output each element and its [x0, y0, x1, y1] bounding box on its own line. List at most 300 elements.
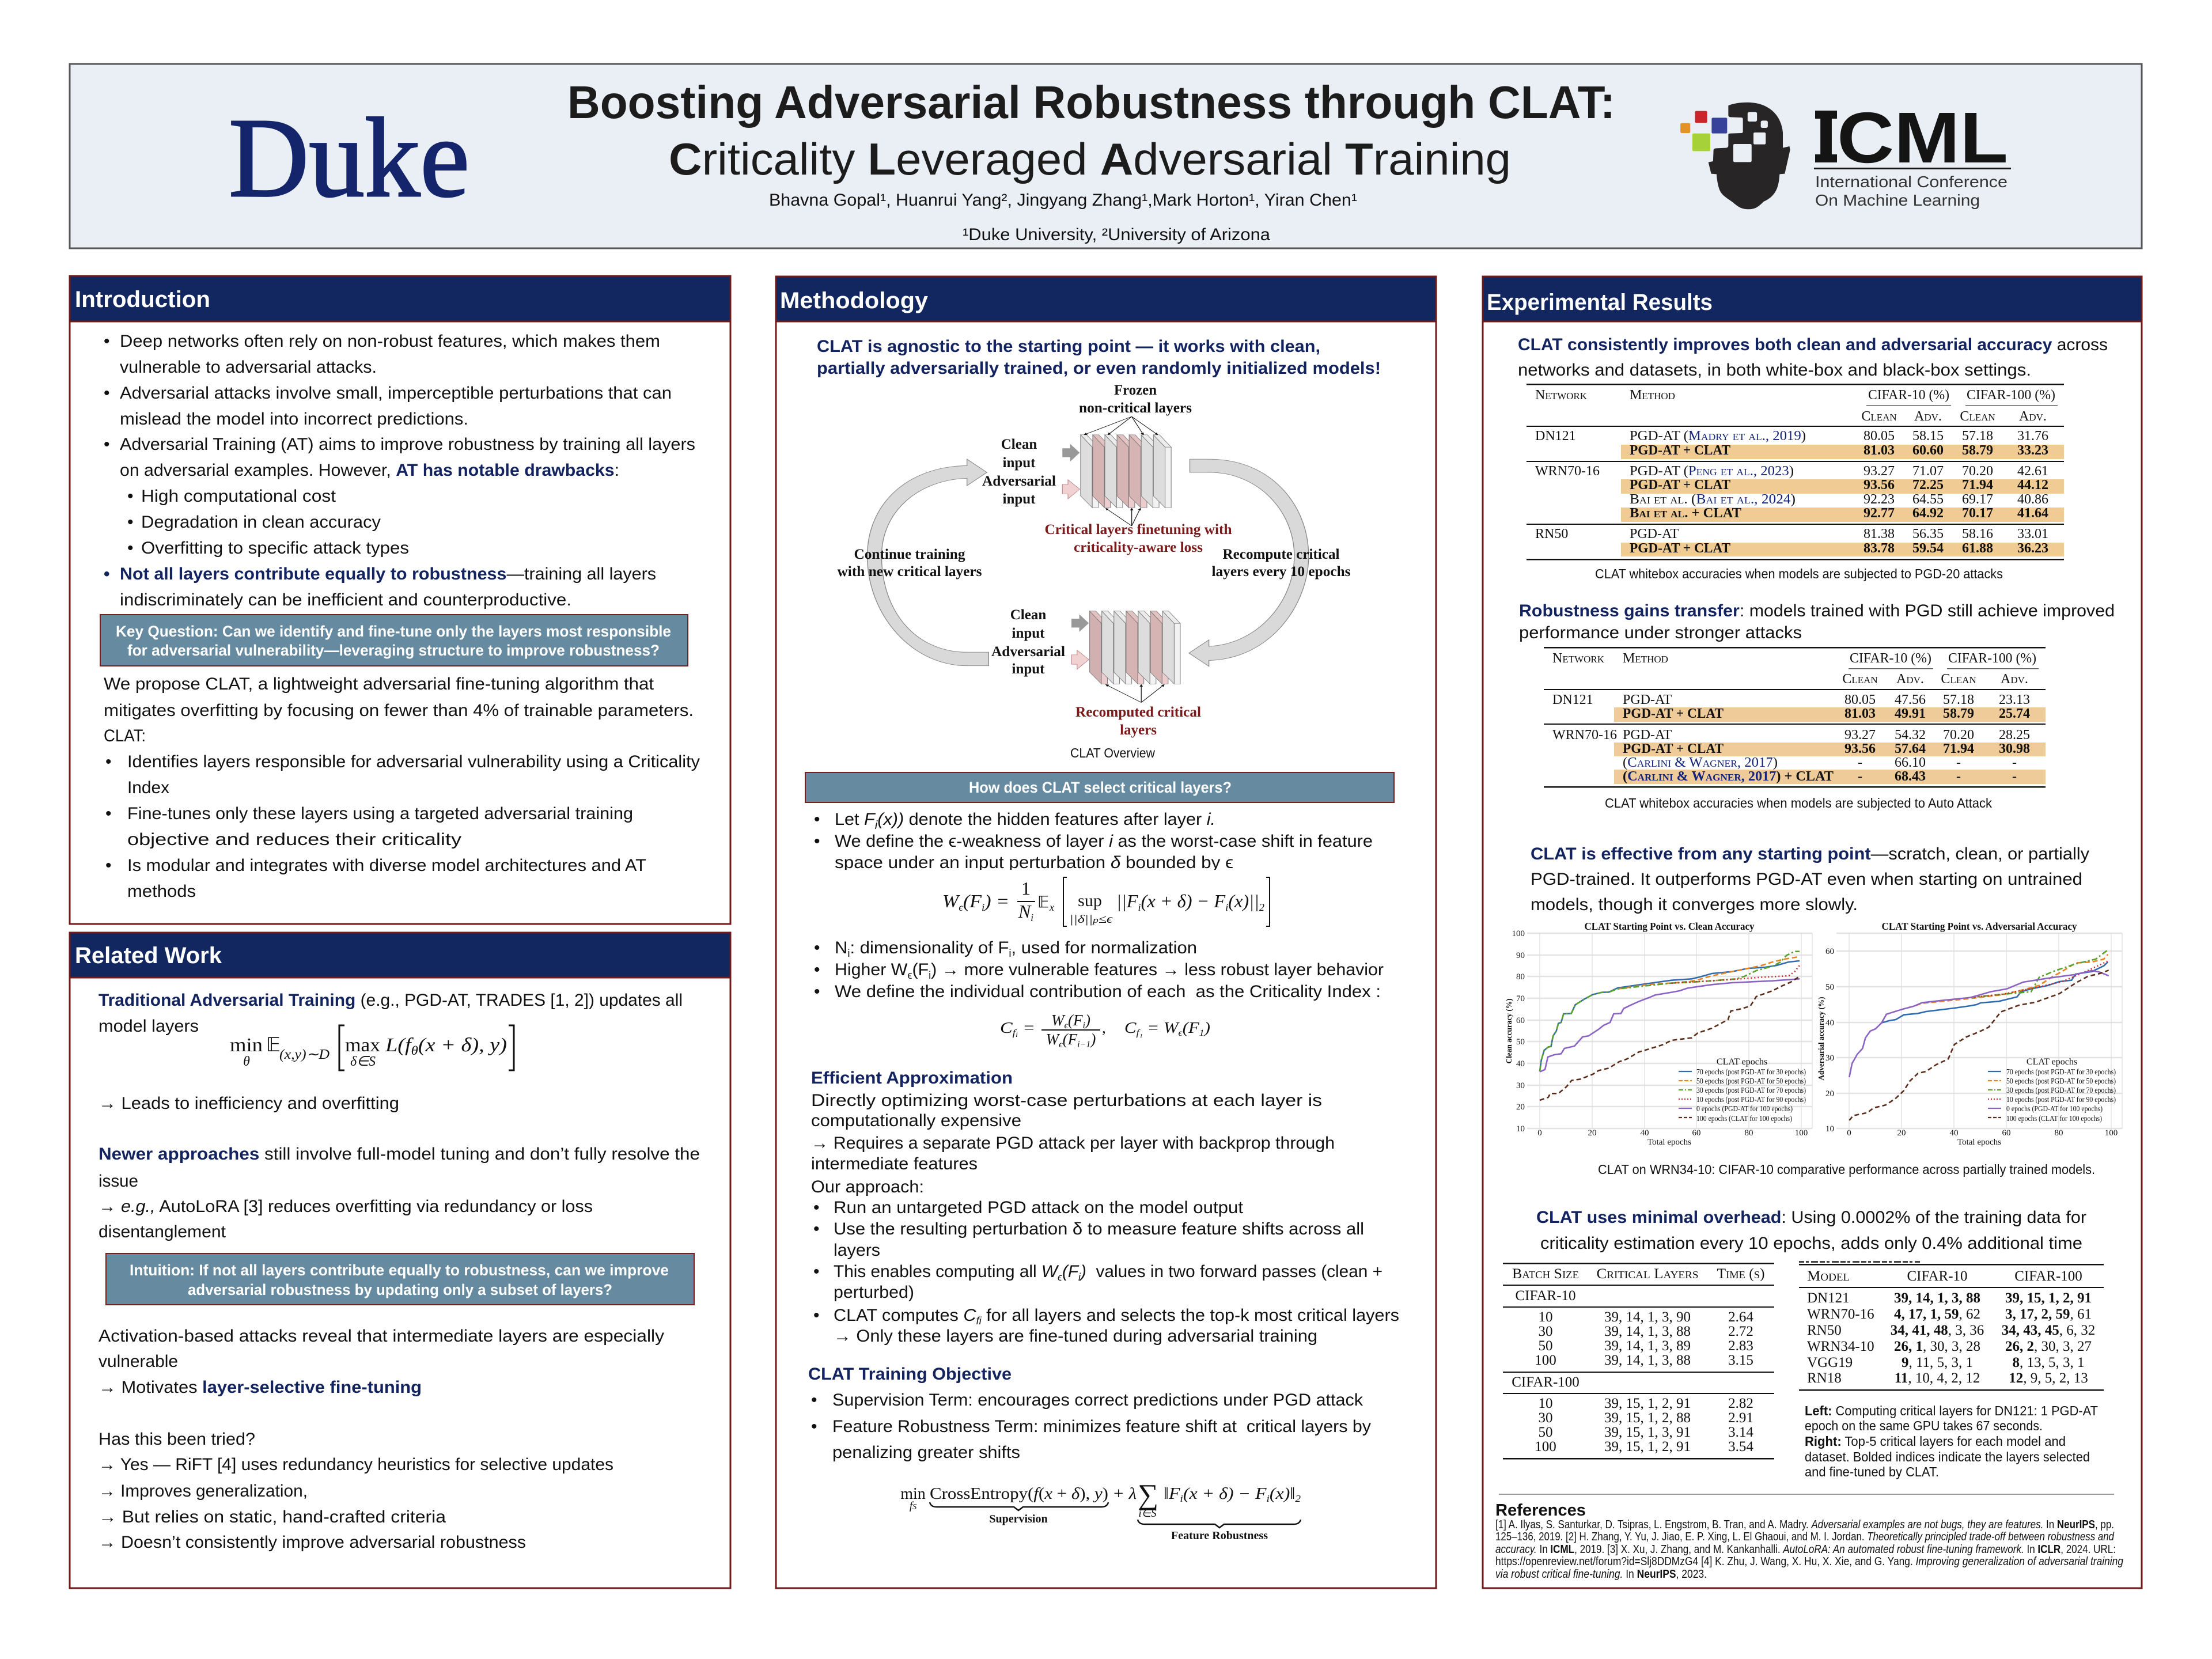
- text: efficient approximation: Our approach:: [811, 1177, 924, 1196]
- chart: adversarial accuracy: 20: [1897, 1128, 1906, 1138]
- note: left and right tables: epoch on the same GPU takes 67 seconds.: [1805, 1418, 2043, 1433]
- formula: criticality index: (F: [1063, 1031, 1078, 1048]
- table: PGD-20 whitebox accuracies: Adv.: [1914, 409, 1942, 424]
- table: PGD-20 whitebox accuracies: Clean: [1861, 409, 1897, 424]
- chart: clean accuracy: 100: [1512, 929, 1525, 938]
- table: PGD-20 whitebox accuracies: PGD-AT + CLAT: [1630, 443, 1730, 458]
- table: top-5 critical layers: CIFAR-100: [2014, 1268, 2082, 1284]
- formula: training objective: ‖F: [1164, 1485, 1178, 1503]
- bullets: epsilon weakness: [814, 810, 1373, 877]
- bullets: normalization and criticality: •: [814, 938, 820, 957]
- table: batch size and time: [1503, 1263, 1774, 1460]
- table: Auto Attack whitebox accuracies: 49.91: [1895, 706, 1926, 721]
- diagram: CLAT overview: Adversarial: [982, 474, 1056, 489]
- table: PGD-20 whitebox accuracies: 44.12: [2017, 478, 2048, 493]
- text: CLAT proposal: Index: [127, 778, 169, 797]
- legend: 0 epochs (PGD-AT for 100 epochs): [2006, 1105, 2103, 1113]
- bullets: epsilon weakness: denote the hidden features after layer i.: [908, 810, 1215, 829]
- chart: adversarial accuracy: 0: [1847, 1128, 1851, 1138]
- table: top-5 critical layers: WRN70-16: [1807, 1306, 1874, 1322]
- formula: training objective: i: [1267, 1493, 1270, 1504]
- table: PGD-20 whitebox accuracies: 70.20: [1962, 464, 1993, 479]
- bullets: epsilon weakness: i: [875, 819, 878, 832]
- heading: Experimental Results: Experimental Results: [1487, 290, 1713, 315]
- diagram: CLAT overview: Adversarial: [991, 644, 1065, 660]
- table: Auto Attack whitebox accuracies: CIFAR-10 (%): [1850, 651, 1931, 666]
- table: Auto Attack whitebox accuracies: PGD-AT: [1623, 728, 1672, 743]
- formula: min-max objective: (x + δ), y): [418, 1035, 507, 1056]
- table: batch size and time: 39, 14, 1, 3, 90: [1604, 1309, 1691, 1325]
- text: efficient approximation: •: [813, 1198, 820, 1217]
- legend: 10 epochs (post PGD-AT for 90 epochs): [1696, 1096, 1806, 1104]
- statement: agnostic to starting point: [817, 337, 1381, 378]
- chart: adversarial accuracy: CLAT Starting Point vs. Adversarial Accuracy: [1881, 921, 2077, 932]
- bullets: normalization and criticality: ϵ: [907, 969, 912, 981]
- chart: clean accuracy: [1505, 921, 1812, 1147]
- table: PGD-20 whitebox accuracies: PGD-AT (Madry et al., 2019): [1630, 429, 1806, 444]
- formula: min-max objective: min: [230, 1035, 263, 1056]
- table: Auto Attack whitebox accuracies: 93.27: [1844, 728, 1876, 743]
- table: PGD-20 whitebox accuracies: 42.61: [2017, 464, 2048, 479]
- title: Boosting Adversarial Robustness through CLAT:: [567, 77, 1615, 128]
- table: Auto Attack whitebox accuracies: PGD-AT + CLAT: [1623, 706, 1724, 721]
- panel: Methodology: [776, 276, 1436, 1588]
- chart: clean accuracy: 60: [1692, 1128, 1700, 1138]
- table: Auto Attack whitebox accuracies: Method: [1623, 651, 1668, 666]
- bullets: adversarial training background: •: [127, 539, 134, 558]
- formula: weakness: i: [1031, 912, 1033, 923]
- text: efficient approximation: → Only these layers are fine-tuned during adversarial training: [834, 1327, 1317, 1346]
- table: top-5 critical layers: RN50: [1807, 1323, 1842, 1338]
- table: top-5 critical layers: 11, 10, 4, 2, 12: [1895, 1370, 1980, 1386]
- table: batch size and time: 2.82: [1728, 1396, 1753, 1411]
- table: batch size and time: 39, 14, 1, 3, 88: [1604, 1324, 1691, 1339]
- legend: 100 epochs (CLAT for 100 epochs): [1696, 1115, 1792, 1123]
- table: batch size and time: 2.72: [1728, 1324, 1753, 1339]
- table: Auto Attack whitebox accuracies: 71.94: [1943, 741, 1974, 756]
- diagram: CLAT overview: Clean: [1001, 437, 1037, 452]
- table: Auto Attack whitebox accuracies: PGD-AT: [1623, 692, 1672, 707]
- table: PGD-20 whitebox accuracies: 93.56: [1863, 478, 1895, 493]
- statement: effective from any starting point: models, though it converges more slowly.: [1531, 895, 1858, 914]
- table: top-5 critical layers: VGG19: [1807, 1355, 1853, 1370]
- table: PGD-20 whitebox accuracies: CIFAR-100 (%): [1967, 388, 2055, 403]
- table: batch size and time: 3.54: [1728, 1439, 1753, 1455]
- table: Auto Attack whitebox accuracies: -: [1956, 755, 1961, 770]
- text: efficient approximation: fi: [976, 1315, 982, 1327]
- table: batch size and time: 2.91: [1728, 1410, 1753, 1426]
- table: batch size and time: 39, 15, 1, 2, 91: [1604, 1396, 1691, 1411]
- text: layer-selective fine-tuning: Has this been tried?: [99, 1430, 255, 1449]
- heading: Methodology: [776, 276, 1436, 321]
- note: left and right tables: Right: Top-5 critical layers for each model and: [1805, 1434, 2066, 1449]
- text: efficient approximation: Run an untargeted PGD attack on the model output: [834, 1198, 1244, 1217]
- legend: 70 epochs (post PGD-AT for 30 epochs): [2006, 1068, 2116, 1077]
- formula: criticality index: ): [1203, 1019, 1210, 1036]
- formula: weakness: (F: [963, 891, 982, 911]
- text: efficient approximation: •: [813, 1306, 820, 1325]
- text: efficient approximation: [811, 1069, 1399, 1346]
- table: PGD-20 whitebox accuracies: Bai et al. + CLAT: [1630, 506, 1741, 521]
- table: batch size and time: Batch Size: [1512, 1266, 1579, 1282]
- text: efficient approximation: Directly optimizing worst-case perturbations at each layer is: [811, 1091, 1322, 1110]
- legend: 30 epochs (post PGD-AT for 70 epochs): [1696, 1086, 1806, 1095]
- table: PGD-20 whitebox accuracies: 61.88: [1962, 541, 1993, 556]
- panel: Experimental Results: [1483, 276, 2142, 1588]
- text: layer-selective fine-tuning: vulnerable: [99, 1352, 178, 1371]
- legend: 10 epochs (post PGD-AT for 90 epochs): [2006, 1096, 2116, 1104]
- table: batch size and time: 39, 15, 1, 2, 91: [1604, 1439, 1691, 1455]
- text: CLAT proposal: Fine-tunes only these layers using a targeted adversarial training: [127, 804, 633, 823]
- chart: adversarial accuracy: Adversarial accuracy (%): [1817, 997, 1826, 1081]
- table: batch size and time: 2.64: [1728, 1309, 1753, 1325]
- bullets: adversarial training background: •: [104, 565, 110, 584]
- table: PGD-20 whitebox accuracies: PGD-AT: [1630, 527, 1679, 541]
- formula: criticality index: =: [1018, 1019, 1035, 1036]
- note: left and right tables: dataset. Bolded indices indicate the layers selected: [1805, 1449, 2090, 1464]
- formula: training objective: Feature Robustness: [1171, 1529, 1268, 1542]
- chart: clean accuracy: Clean accuracy (%): [1505, 998, 1514, 1063]
- bullets: normalization and criticality: : dimensionality of F: [850, 938, 1009, 957]
- table: top-5 critical layers: DN121: [1807, 1290, 1850, 1306]
- text: layer-selective fine-tuning: → But relies on static, hand-crafted criteria: [99, 1508, 446, 1527]
- heading: Related Work: [70, 933, 730, 978]
- heading: Methodology: Methodology: [780, 288, 929, 313]
- bullets: adversarial training background: vulnerable to adversarial attacks.: [120, 358, 377, 377]
- table: top-5 critical layers: 26, 2, 30, 3, 27: [2005, 1339, 2092, 1354]
- text: efficient approximation: computationally expensive: [811, 1111, 1021, 1130]
- Duke logo: Duke: [229, 94, 469, 221]
- text: CLAT proposal: We propose CLAT, a lightweight adversarial fine-tuning algorithm that: [104, 675, 654, 694]
- text: CLAT proposal: Is modular and integrates with diverse model architectures and AT: [127, 856, 646, 875]
- table: top-5 critical layers: [1799, 1264, 2104, 1391]
- bullets: normalization and criticality: ) → more vulnerable features → less robust layer behavior: [931, 960, 1384, 979]
- legend: CLAT epochs: [1717, 1057, 1767, 1067]
- bullets: normalization and criticality: We define the individual contribution of each as the Criticality Index :: [835, 982, 1381, 1001]
- formula: criticality index: [1000, 1012, 1210, 1050]
- text: efficient approximation: Use the resulting perturbation δ to measure feature shifts across all: [834, 1219, 1364, 1238]
- text: efficient approximation: (F: [1062, 1262, 1080, 1281]
- text: CLAT proposal: Identifies layers responsible for adversarial vulnerability using a Criticality: [127, 752, 700, 771]
- bullets: adversarial training background: Deep networks often rely on non-robust features, which makes them: [120, 332, 660, 351]
- references: [1] A. Ilyas, S. Santurkar, D. Tsipras, L. Engstrom, B. Tran, and A. Madry. Adversarial examples are not bugs, they are features. In NeurIPS, pp.: [1495, 1518, 2114, 1531]
- table: top-5 critical layers: 39, 15, 1, 2, 91: [2005, 1290, 2092, 1306]
- table: Auto Attack whitebox accuracies: 57.64: [1895, 741, 1926, 756]
- chart: clean accuracy: 40: [1641, 1128, 1649, 1138]
- formula: training objective: + λ: [1112, 1485, 1137, 1503]
- chart: clean accuracy: 60: [1516, 1016, 1525, 1025]
- diagram: CLAT overview: non-critical layers: [1079, 400, 1192, 416]
- bullets: normalization and criticality: Higher W: [835, 960, 907, 979]
- caption: Auto Attack table: CLAT whitebox accuracies when models are subjected to Auto Attack: [1605, 796, 1992, 810]
- formula: min-max objective: max: [345, 1035, 380, 1056]
- table: batch size and time: 50: [1538, 1425, 1553, 1440]
- bullets: normalization and criticality: i: [929, 969, 931, 981]
- diagram: CLAT overview: with new critical layers: [838, 564, 982, 579]
- title: Criticality Leveraged Adversarial Training: [669, 134, 1511, 184]
- table: Auto Attack whitebox accuracies: -: [2012, 769, 2017, 784]
- diagram: CLAT overview: [838, 382, 1351, 738]
- table: batch size and time: 2.83: [1728, 1338, 1753, 1354]
- statement: minimal overhead: criticality estimation every 10 epochs, adds only 0.4% additional time: [1540, 1234, 2082, 1253]
- text: CLAT proposal: CLAT:: [104, 726, 146, 745]
- formula: criticality index: i: [1082, 1021, 1085, 1031]
- chart: clean accuracy: CLAT Starting Point vs. Clean Accuracy: [1584, 921, 1755, 932]
- table: PGD-20 whitebox accuracies: 36.23: [2017, 541, 2048, 556]
- text: CLAT proposal: •: [105, 856, 112, 875]
- callout: intuition: adversarial robustness by updating only a subset of layers?: [188, 1281, 612, 1298]
- diagram: CLAT overview: input: [1003, 455, 1036, 471]
- formula: criticality index: ): [1089, 1031, 1096, 1048]
- chart: clean accuracy: 20: [1588, 1128, 1597, 1138]
- formula: weakness: 𝔼: [1037, 892, 1049, 911]
- statement: robustness gains transfer: [1519, 601, 2115, 642]
- table: PGD-20 whitebox accuracies: 58.79: [1962, 443, 1993, 458]
- table: PGD-20 whitebox accuracies: PGD-AT + CLAT: [1630, 478, 1730, 493]
- formula: criticality index: ϵ: [1059, 1040, 1063, 1050]
- table: PGD-20 whitebox accuracies: 31.76: [2017, 429, 2048, 444]
- statement: minimal overhead: [1536, 1208, 2086, 1253]
- formula: weakness: ||δ|| p≤ϵ: [1069, 913, 1113, 926]
- text: traditional adversarial training: [99, 991, 683, 1036]
- chart: clean accuracy: 70: [1516, 994, 1525, 1003]
- table: PGD-20 whitebox accuracies: PGD-AT + CLAT: [1630, 541, 1730, 556]
- table: Auto Attack whitebox accuracies: Clean: [1941, 672, 1976, 687]
- chart: adversarial accuracy: 10: [1825, 1124, 1834, 1134]
- table: PGD-20 whitebox accuracies: 58.16: [1962, 527, 1993, 541]
- table: Auto Attack whitebox accuracies: Adv.: [1896, 672, 1924, 687]
- text: layer-selective fine-tuning: Activation-based attacks reveal that intermediate layers are especially: [99, 1327, 664, 1346]
- chart: adversarial accuracy: 40: [1825, 1018, 1834, 1028]
- table: top-5 critical layers: CIFAR-10: [1907, 1268, 1968, 1284]
- table: Auto Attack whitebox accuracies: 57.18: [1943, 692, 1974, 707]
- chart: adversarial accuracy: Total epochs: [1957, 1138, 2001, 1147]
- chart: clean accuracy: 10: [1516, 1124, 1525, 1134]
- table: PGD-20 whitebox accuracies: CIFAR-10 (%): [1868, 388, 1949, 403]
- bullets: adversarial training background: indiscriminately can be inefficient and counterproductive.: [120, 590, 571, 609]
- bullets: epsilon weakness: space under an input perturbation δ bounded by ϵ: [835, 853, 1233, 872]
- arrows: training loop: [868, 416, 1309, 702]
- table: batch size and time: 39, 15, 1, 2, 88: [1604, 1410, 1691, 1426]
- formula: criticality index: ): [1084, 1012, 1090, 1029]
- chart: adversarial accuracy: 80: [2054, 1128, 2063, 1138]
- references: [1495, 1501, 2123, 1581]
- formula: weakness: (x + δ) − F: [1141, 891, 1226, 911]
- formula: criticality index: i−1: [1077, 1040, 1090, 1050]
- title: [567, 77, 1615, 184]
- table: PGD-20 whitebox accuracies: 80.05: [1863, 429, 1895, 444]
- references: via robust critical fine-tuning. In NeurIPS, 2023.: [1495, 1568, 1707, 1581]
- formula: training objective: Supervision: [989, 1513, 1048, 1525]
- chart: adversarial accuracy: [1817, 921, 2122, 1147]
- text: efficient approximation: layers: [834, 1241, 880, 1260]
- formula: weakness: x: [1049, 902, 1054, 913]
- table: PGD-20 whitebox accuracies: 69.17: [1962, 492, 1993, 507]
- formula: criticality index: (F: [1068, 1012, 1083, 1029]
- table: Auto Attack whitebox accuracies: CIFAR-100 (%): [1948, 651, 2036, 666]
- table: Auto Attack whitebox accuracies: -: [1858, 755, 1862, 770]
- diagram: CLAT overview: Recompute critical: [1222, 547, 1340, 562]
- table: PGD-20 whitebox accuracies: 71.07: [1912, 464, 1944, 479]
- formula: training objective: i∈S: [1138, 1508, 1157, 1520]
- formula: criticality index: = W: [1143, 1019, 1180, 1036]
- chart: clean accuracy: 50: [1516, 1037, 1525, 1047]
- diagram: CLAT overview: input: [1003, 491, 1036, 507]
- chart: adversarial accuracy: 40: [1949, 1128, 1959, 1138]
- formula: criticality index: (F: [1183, 1019, 1199, 1036]
- table: top-5 critical layers: 26, 1, 30, 3, 28: [1894, 1339, 1980, 1354]
- bullets: normalization and criticality: [814, 938, 1384, 1001]
- chart: clean accuracy: 90: [1516, 951, 1525, 960]
- text: efficient approximation: for all layers and selects the top-k most critical layers: [982, 1306, 1399, 1325]
- table: Auto Attack whitebox accuracies: 81.03: [1844, 706, 1876, 721]
- statement: clean and adversarial accuracy: CLAT consistently improves both clean and adversarial accuracy across: [1518, 335, 2108, 354]
- formula: min-max objective: [230, 1025, 514, 1070]
- table: batch size and time: 10: [1538, 1309, 1553, 1325]
- table: Auto Attack whitebox accuracies: (Carlini & Wagner, 2017) + CLAT: [1623, 769, 1834, 784]
- bullets: epsilon weakness: •: [814, 832, 820, 851]
- formula: weakness: i: [1138, 902, 1141, 913]
- table: top-5 critical layers: 34, 41, 48, 3, 36: [1891, 1323, 1984, 1338]
- legend: 100 epochs (CLAT for 100 epochs): [2006, 1115, 2102, 1123]
- table: batch size and time: Time (s): [1717, 1266, 1765, 1282]
- table: Auto Attack whitebox accuracies: [1544, 647, 2046, 788]
- formula: criticality index: W: [1051, 1012, 1065, 1029]
- references: https://openreview.net/forum?id=Slj8DDMzG4 [4] K. Zhu, J. Wang, X. Hu, X. Xie, and G. Yang. Improving generalization of adversarial training: [1495, 1555, 2123, 1568]
- table: PGD-20 whitebox accuracies: 93.27: [1863, 464, 1895, 479]
- formula: criticality index: f: [1013, 1028, 1017, 1038]
- formula: criticality index: ,: [1102, 1019, 1106, 1036]
- panel: Introduction: [70, 276, 730, 924]
- diagram: CLAT overview: layers every 10 epochs: [1212, 564, 1351, 579]
- text: traditional adversarial training: model layers: [99, 1017, 199, 1036]
- chart: adversarial accuracy: 30: [1825, 1054, 1834, 1063]
- text: CLAT training objective: Supervision Term: encourages correct predictions under PGD attack: [832, 1391, 1363, 1410]
- diagram: CLAT overview: Recomputed critical: [1075, 704, 1201, 720]
- table: batch size and time: 10: [1538, 1396, 1553, 1411]
- table: PGD-20 whitebox accuracies: 92.23: [1863, 492, 1895, 507]
- statement: clean and adversarial accuracy: [1518, 335, 2108, 380]
- formula: min-max objective: (x,y)∼D: [279, 1047, 329, 1062]
- chart: clean accuracy: 0: [1537, 1128, 1542, 1138]
- formula: min-max objective: θ: [411, 1043, 418, 1058]
- chart: clean accuracy: 30: [1516, 1081, 1525, 1090]
- references: 125–136, 2019. [2] H. Zhang, Y. Yu, J. Jiao, E. P. Xing, L. El Ghaoui, and M. I. Jordan. Theoretically principled trade-off between robustness and: [1495, 1531, 2115, 1543]
- table: top-5 critical layers: 4, 17, 1, 59, 62: [1894, 1306, 1980, 1322]
- statement: effective from any starting point: PGD-trained. It outperforms PGD-AT even when starting on untrained: [1531, 870, 2082, 889]
- text: layer-selective fine-tuning: [99, 1327, 664, 1552]
- chart: clean accuracy: 100: [1795, 1128, 1808, 1138]
- table: PGD-20 whitebox accuracies: Clean: [1960, 409, 1995, 424]
- caption: PGD-20 table: CLAT whitebox accuracies when models are subjected to PGD-20 attacks: [1595, 566, 2003, 581]
- bullets: normalization and criticality: i: [847, 948, 850, 959]
- table: PGD-20 whitebox accuracies: Adv.: [2019, 409, 2047, 424]
- table: Auto Attack whitebox accuracies: 80.05: [1844, 692, 1876, 707]
- formula: weakness: sup: [1078, 891, 1102, 910]
- chart: clean accuracy: 20: [1516, 1103, 1525, 1112]
- legend: CLAT epochs: [2027, 1057, 2077, 1067]
- statement: minimal overhead: CLAT uses minimal overhead: Using 0.0002% of the training data for: [1536, 1208, 2086, 1227]
- authors: Bhavna Gopal¹, Huanrui Yang², Jingyang Zhang¹,Mark Horton¹, Yiran Chen¹: [769, 191, 1357, 210]
- table: Auto Attack whitebox accuracies: -: [2012, 755, 2017, 770]
- references: accuracy. In ICML, 2019. [3] X. Xu, J. Zhang, and M. Kankanhalli. AutoLoRA: An automated robust fine-tuning framework. In ICLR, 2024. URL:: [1495, 1543, 2116, 1556]
- diagram: CLAT overview: input: [1012, 626, 1045, 641]
- table: batch size and time: 39, 14, 1, 3, 88: [1604, 1353, 1691, 1368]
- diagram: CLAT overview: Frozen: [1114, 382, 1157, 398]
- table: PGD-20 whitebox accuracies: PGD-AT (Peng et al., 2023): [1630, 464, 1794, 479]
- bullets: adversarial training background: Not all layers contribute equally to robustness —training all layers: [120, 565, 656, 584]
- heading: Introduction: [70, 276, 730, 321]
- bullets: adversarial training background: •: [127, 513, 134, 532]
- bullets: adversarial training background: Adversarial attacks involve small, imperceptible perturbations that can: [120, 384, 672, 403]
- legend: 50 epochs (post PGD-AT for 50 epochs): [2006, 1077, 2116, 1086]
- table: Auto Attack whitebox accuracies: 23.13: [1999, 692, 2030, 707]
- table: Auto Attack whitebox accuracies: 25.74: [1999, 706, 2030, 721]
- formula: training objective: (x)‖: [1270, 1485, 1295, 1503]
- text: efficient approximation: → Requires a separate PGD attack per layer with backprop through: [811, 1134, 1335, 1153]
- formula: criticality index: f₁: [1136, 1028, 1143, 1038]
- bullets: epsilon weakness: •: [814, 810, 820, 829]
- table: PGD-20 whitebox accuracies: 83.78: [1863, 541, 1895, 556]
- diagram: CLAT overview: Continue training: [854, 547, 965, 562]
- bullets: adversarial training background: on adversarial examples. However, AT has notable drawbacks:: [120, 461, 619, 480]
- table: batch size and time: 30: [1538, 1410, 1553, 1426]
- text: efficient approximation: i: [1078, 1271, 1081, 1283]
- formula: min-max objective: 𝔼: [266, 1033, 281, 1056]
- formula: training objective: (x + δ) − F: [1183, 1485, 1267, 1503]
- text: efficient approximation: ϵ: [1058, 1271, 1063, 1283]
- formula: min-max objective: L(f: [385, 1035, 408, 1056]
- table: PGD-20 whitebox accuracies: 58.15: [1912, 429, 1944, 444]
- table: batch size and time: 30: [1538, 1324, 1553, 1339]
- bullets: adversarial training background: •: [104, 384, 110, 403]
- table: Auto Attack whitebox accuracies: DN121: [1552, 692, 1593, 707]
- statement: effective from any starting point: [1531, 844, 2089, 914]
- formula: criticality index: C: [1000, 1019, 1010, 1036]
- text: CLAT proposal: methods: [127, 882, 196, 901]
- text: limitations and newer approaches: → Leads to inefficiency and overfitting: [99, 1094, 399, 1113]
- table: PGD-20 whitebox accuracies: 59.54: [1912, 541, 1944, 556]
- formula: weakness: 2: [1259, 902, 1264, 913]
- references: References: [1495, 1501, 1586, 1520]
- text: layer-selective fine-tuning: → Yes — RiFT [4] uses redundancy heuristics for selective updates: [99, 1455, 613, 1474]
- text: efficient approximation: CLAT computes C: [834, 1306, 976, 1325]
- text: efficient approximation: This enables computing all W: [834, 1262, 1058, 1281]
- chart: adversarial accuracy: 60: [2002, 1128, 2010, 1138]
- bullets: normalization and criticality: •: [814, 960, 820, 979]
- formula: training objective: 2: [1295, 1493, 1301, 1504]
- formula: min-max objective: θ: [243, 1054, 250, 1069]
- formula: training objective: ∑: [1138, 1478, 1158, 1510]
- chart: adversarial accuracy: 100: [2105, 1128, 2118, 1138]
- text: limitations and newer approaches: issue: [99, 1172, 138, 1191]
- legend: 70 epochs (post PGD-AT for 30 epochs): [1696, 1068, 1806, 1077]
- callout: how does CLAT select: [805, 772, 1394, 802]
- callout: how does CLAT select: How does CLAT select critical layers?: [969, 779, 1232, 796]
- table: Auto Attack whitebox accuracies: Clean: [1842, 672, 1878, 687]
- table: PGD-20 whitebox accuracies: Method: [1630, 388, 1675, 403]
- formula: weakness: W: [942, 891, 958, 911]
- table: PGD-20 whitebox accuracies: 92.77: [1863, 506, 1895, 521]
- formula: weakness: i: [982, 902, 984, 913]
- table: PGD-20 whitebox accuracies: WRN70-16: [1535, 464, 1600, 479]
- ICML logo: International Conference: [1815, 173, 2008, 191]
- note: left and right tables: [1805, 1403, 2098, 1479]
- text: layer-selective fine-tuning: → Doesn’t consistently improve adversarial robustness: [99, 1533, 526, 1552]
- bullets: normalization and criticality: •: [814, 982, 820, 1001]
- text: layer-selective fine-tuning: → Motivates layer-selective fine-tuning: [99, 1378, 422, 1397]
- table: top-5 critical layers: Model: [1807, 1268, 1850, 1284]
